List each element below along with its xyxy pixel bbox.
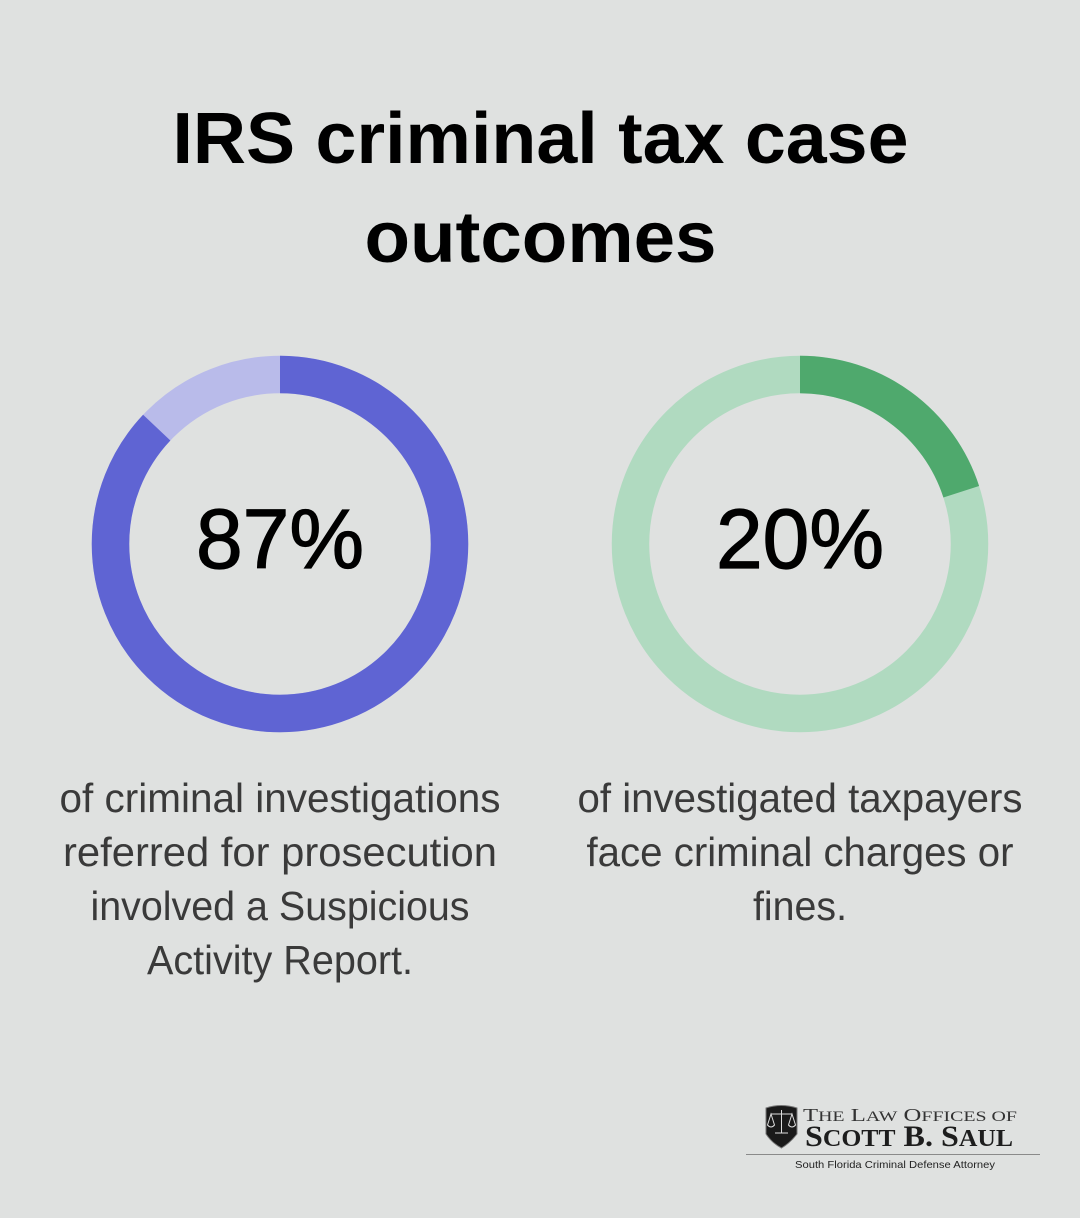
- description: 87%: of criminal investigations: [60, 775, 500, 821]
- donut chart: 87%: [110, 374, 450, 714]
- logo tagline: South Florida Criminal Defense Attorney: [795, 1159, 996, 1171]
- value: 87%: 87%: [196, 492, 364, 586]
- description: 87%: referred for prosecution: [63, 829, 497, 875]
- description: 87%: involved a Suspicious: [90, 883, 470, 929]
- logo wordmark: T HE L AW O FFICES OF: [803, 1105, 1017, 1125]
- logo: The Law Offices of Scott B. Saul: [746, 1105, 1040, 1171]
- title: IRS criminal tax case: [172, 99, 908, 179]
- description: 20%: of investigated taxpayers: [578, 775, 1022, 821]
- description: 20%: fines.: [753, 883, 847, 929]
- value: 20%: 20%: [716, 492, 884, 586]
- logo divider: [746, 1154, 1040, 1155]
- title: [172, 99, 908, 278]
- description: 20%: [578, 775, 1022, 929]
- logo wordmark: [803, 1105, 1017, 1153]
- description: 87%: [60, 775, 500, 983]
- panel: 20% statistic: [578, 374, 1022, 929]
- icon: shield with scales: [766, 1106, 797, 1148]
- panel: 87% statistic: [60, 374, 500, 983]
- title: outcomes: [364, 198, 716, 278]
- description: 87%: Activity Report.: [147, 937, 413, 983]
- donut chart: 20%: [630, 374, 970, 714]
- description: 20%: face criminal charges or: [586, 829, 1014, 875]
- logo wordmark: SCOTT B. SAUL: [805, 1120, 1013, 1153]
